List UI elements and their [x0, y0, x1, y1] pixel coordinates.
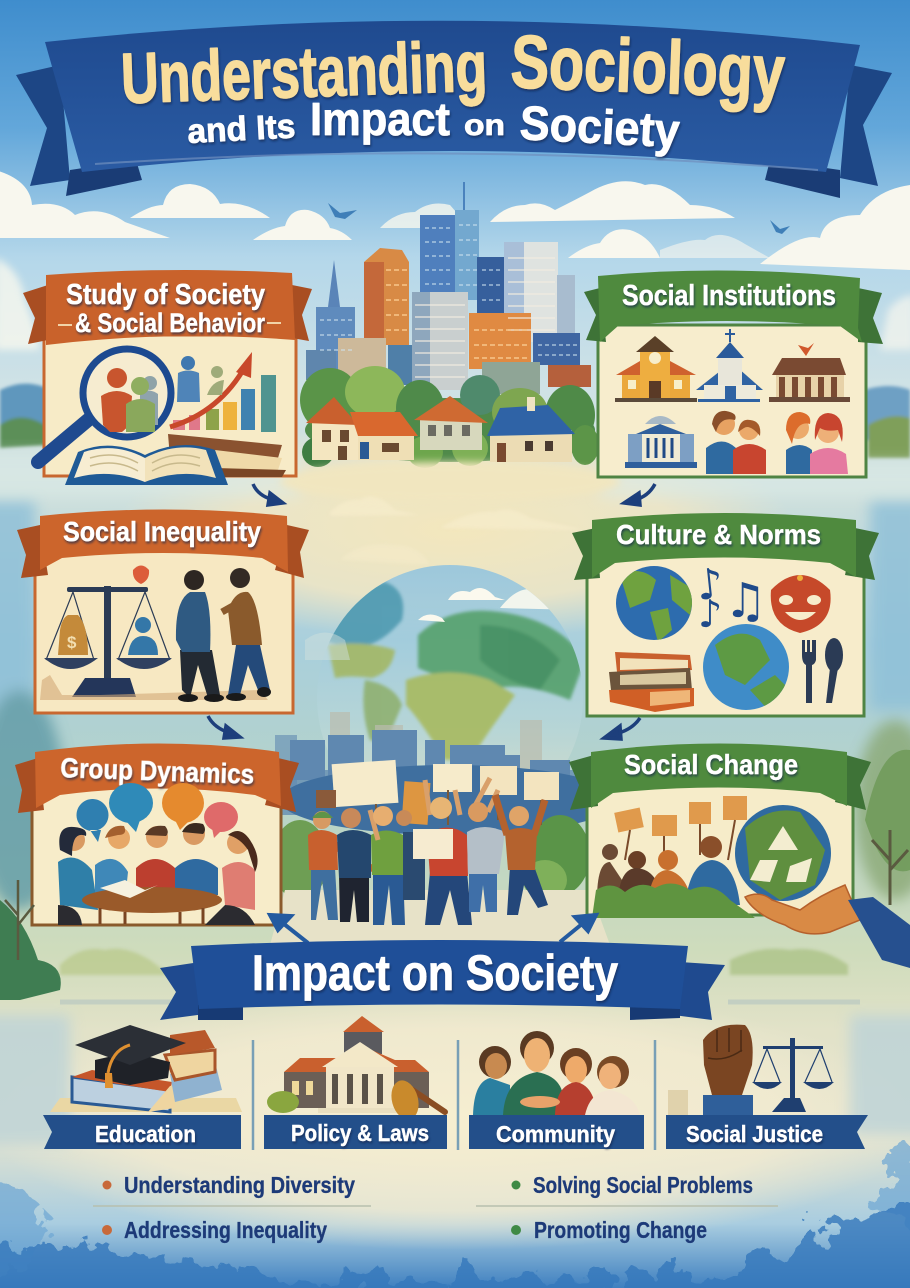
icon: speech bubbles: [76, 783, 238, 842]
icon: recycling globe: [735, 805, 831, 901]
icon: people group left: [706, 411, 766, 474]
label ribbon: [264, 1115, 447, 1149]
icon: music notes: [694, 558, 767, 636]
person 1: [58, 827, 98, 910]
impact: education: [43, 1025, 242, 1149]
title text: Sociology: [509, 19, 787, 114]
ribbon text: Group Dynamics: [60, 752, 255, 790]
icon: music notes: ♪: [694, 558, 726, 610]
panel card: [598, 325, 866, 477]
protester 3: [370, 806, 405, 925]
panel: culture and norms: [572, 513, 879, 716]
impact: policy and laws: [264, 1016, 447, 1149]
icon: museum: [769, 343, 850, 402]
panel card: [587, 555, 864, 716]
icon: grey person: [207, 366, 224, 395]
man in brown jacket: [222, 568, 271, 701]
protester 4 with sign: [413, 780, 472, 925]
icon: bank: [625, 416, 697, 468]
decorative cream clouds above globe: [330, 497, 585, 565]
icon: balance scale: [752, 1038, 834, 1112]
banner body: [45, 21, 860, 172]
window stripes: [415, 258, 555, 377]
subtitle text: and Its: [186, 107, 296, 151]
icon: stacked books: [609, 652, 694, 712]
round table: [58, 880, 255, 925]
ribbon text: Social Change: [624, 749, 798, 780]
panel: social change: [569, 744, 910, 968]
panel card: [35, 550, 293, 713]
icon: two men talking: [176, 568, 271, 702]
house 2: [414, 396, 488, 450]
impact: community: [469, 1031, 644, 1149]
arrow: [270, 915, 308, 943]
ribbon: [584, 270, 883, 344]
subtitle text: Impact: [310, 93, 450, 145]
cream road: [280, 462, 620, 502]
protester 6: [495, 795, 548, 915]
bullet: addressing inequality: Addressing Inequality: [124, 1217, 327, 1243]
icon: fork and spoon: [802, 638, 843, 703]
label text: Community: [496, 1121, 615, 1147]
house 1: [306, 397, 418, 460]
icon: location pin: [133, 566, 149, 584]
label text: Social Justice: [686, 1121, 823, 1147]
icon: raised fist: [668, 1025, 753, 1115]
banner body: [191, 940, 688, 1009]
impact: social justice: [666, 1025, 868, 1149]
arrow: [624, 484, 655, 505]
label text: Policy & Laws: [291, 1120, 429, 1146]
panel card: [32, 785, 281, 925]
ribbon: [15, 744, 299, 813]
globe clouds: [418, 588, 549, 622]
icon: helping hand: [745, 885, 910, 968]
birds: [328, 203, 790, 234]
ribbon: [572, 513, 879, 580]
arrows between panels: [208, 484, 655, 943]
icon: balance scale: [44, 586, 172, 697]
arrow: [560, 915, 596, 942]
banner tails: [16, 65, 892, 198]
protester 1: [308, 811, 370, 920]
icon: open book: [65, 445, 228, 485]
icon: theatre mask: [771, 575, 831, 633]
faded skyline: [275, 712, 620, 835]
title banner: [16, 19, 892, 198]
protest scene: [270, 760, 610, 945]
icon: church: [696, 329, 763, 402]
central city illustration: [280, 182, 620, 502]
title text: Understanding: [120, 27, 488, 119]
subtitle text: Society: [518, 97, 681, 158]
bullet: promoting change: Promoting Change: [534, 1217, 707, 1243]
ribbon text: Social Inequality: [63, 516, 261, 547]
icon: music notes: ♪: [698, 592, 722, 636]
icon: balance scale: $: [67, 633, 77, 652]
icon: magnifying glass: [38, 349, 171, 462]
subtitle text: [186, 93, 681, 158]
icon: globe large: [703, 624, 790, 712]
banner text: Impact on Society: [252, 945, 618, 1001]
ribbon text: [66, 279, 265, 338]
protesters: [308, 778, 548, 925]
label ribbon: [43, 1115, 241, 1149]
person 5: [222, 831, 258, 910]
icon: courthouse and gavel: [267, 1016, 445, 1123]
label text: Education: [95, 1121, 196, 1147]
icon: globe small: [616, 566, 695, 642]
icon: bushes: [592, 883, 755, 918]
label ribbon: [666, 1115, 868, 1149]
protester 2: [337, 808, 371, 922]
label ribbon: [469, 1115, 644, 1149]
ribbon: [23, 270, 312, 345]
ribbon text: Culture & Norms: [616, 519, 821, 550]
panel: group dynamics: [15, 744, 299, 925]
ribbon: [17, 510, 309, 578]
person 3: [136, 826, 175, 890]
landscape: hills and river banks: [0, 384, 910, 497]
subtitle text: on: [464, 109, 505, 142]
icon: stacked books: [168, 434, 286, 477]
bullet: understanding diversity: Understanding Diversity: [124, 1172, 355, 1198]
icon: trend arrow: [170, 352, 252, 427]
icon: people group right: [786, 412, 848, 474]
panel: social inequality: [17, 510, 309, 713]
trees: [300, 366, 599, 468]
ribbon text: & Social Behavior: [75, 308, 265, 338]
skyscrapers: [306, 182, 591, 394]
arrow: [208, 716, 240, 738]
icon: bar chart: [173, 375, 276, 432]
icon: seated group at table: [58, 823, 258, 925]
man in suit: [176, 570, 224, 702]
icon: group of people: [473, 1031, 640, 1115]
panel: social institutions: [584, 270, 883, 477]
lower scenery: shrubs and shore: [0, 750, 910, 1002]
icon: music notes: ♫: [724, 573, 767, 629]
dark protester: [396, 810, 425, 900]
icon: school: [615, 336, 697, 402]
panel card: [587, 780, 853, 915]
impact on society banner: [160, 940, 725, 1020]
protest signs: [316, 760, 559, 830]
arrow: [604, 718, 640, 739]
arrow: [253, 484, 283, 505]
house 3: [487, 397, 575, 462]
ribbon text: Social Institutions: [622, 280, 836, 312]
icon: blue person: [177, 356, 200, 402]
ribbon text: Study of Society: [66, 279, 265, 311]
person 4: [175, 823, 218, 895]
protester 5: [467, 778, 505, 912]
clouds: [0, 170, 910, 350]
bushes: [272, 815, 590, 900]
banner tails: [160, 962, 725, 1020]
bullet: solving social problems: Solving Social Problems: [533, 1172, 753, 1198]
panel: study of society and social behavior: [23, 270, 312, 485]
icon: graduation cap and books: [50, 1025, 242, 1112]
continents: [325, 582, 585, 760]
icon: signs and crowd: [597, 796, 747, 905]
icon: skyline silhouette: [40, 675, 268, 700]
person 2: [95, 826, 130, 900]
globe: [305, 565, 581, 766]
panel card: [44, 335, 296, 476]
ribbon: [569, 744, 871, 810]
